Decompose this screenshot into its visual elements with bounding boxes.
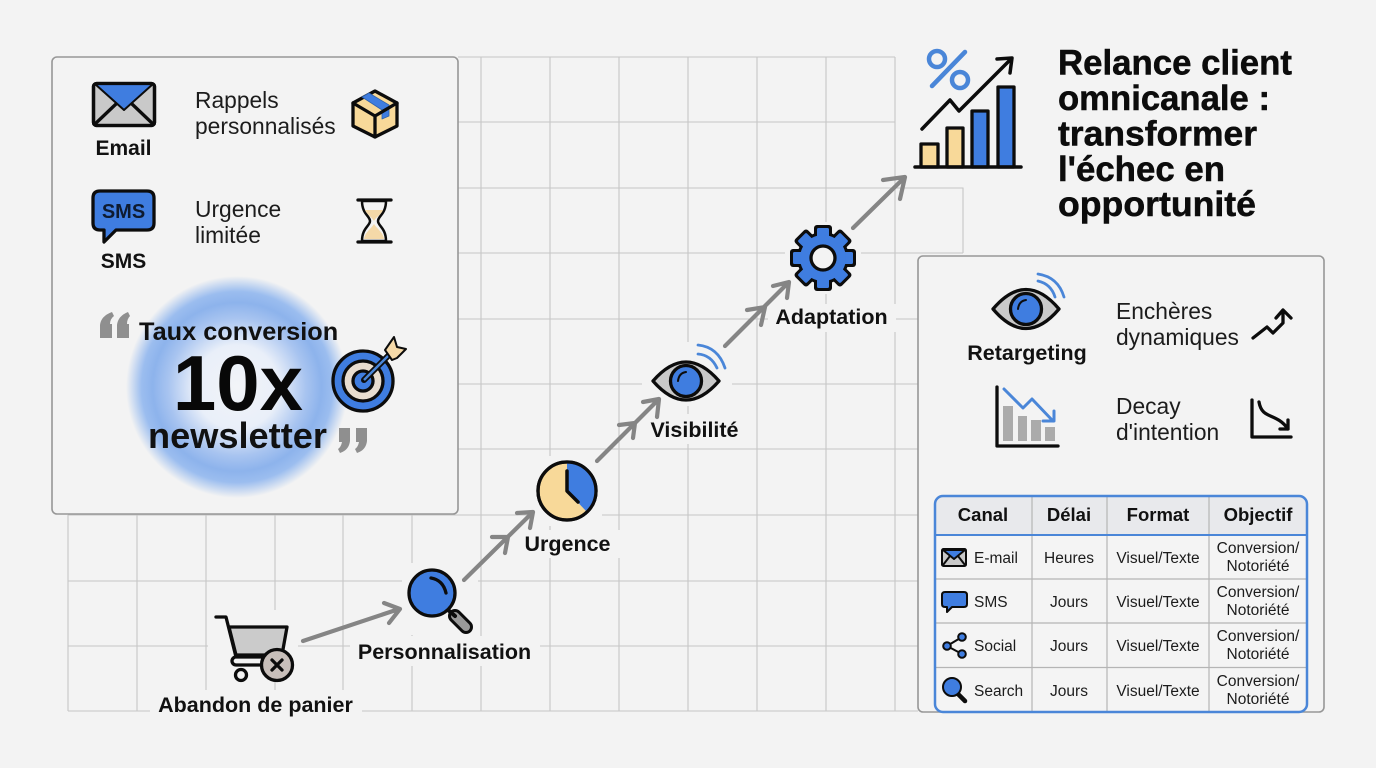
text: limited urgency: Urgence	[195, 196, 281, 222]
row: SMS: Jours	[1050, 594, 1088, 611]
icon: closing quote	[338, 428, 367, 453]
label: Visibilité	[650, 418, 739, 442]
text: dynamic bidding: dynamiques	[1116, 324, 1239, 350]
arrow: visibility to adaptation	[725, 282, 789, 346]
label: Adaptation	[775, 305, 888, 329]
table header: Objectif	[1224, 504, 1293, 525]
row: Search: Notoriété	[1227, 691, 1289, 708]
row: E-mail: E-mail	[974, 550, 1018, 567]
title: omnicanale :	[1058, 79, 1270, 118]
row: Search: Visuel/Texte	[1116, 683, 1200, 700]
table: channels	[935, 496, 1307, 712]
step: Personnalisation	[358, 570, 531, 664]
text: 10x: 10x	[173, 339, 303, 427]
panel: email, SMS and conversion	[52, 57, 458, 514]
callout: conversion rate	[100, 276, 406, 498]
row: E-mail	[942, 540, 1300, 575]
icon: envelope	[94, 84, 154, 126]
icon: decay curve	[1252, 400, 1291, 437]
row: SMS: Notoriété	[1227, 602, 1289, 619]
text: personalised reminders: personnalisés	[195, 113, 336, 139]
title: l'échec en	[1058, 150, 1225, 189]
text: Taux conversion: Taux conversion	[139, 318, 338, 346]
row: SMS: SMS	[974, 594, 1008, 611]
label: Personnalisation	[358, 640, 531, 664]
icon: zigzag up arrow	[1253, 310, 1291, 338]
label: Abandon de panier	[158, 693, 353, 717]
row: Search: Jours	[1050, 683, 1088, 700]
text: intent decay: Decay	[1116, 393, 1181, 419]
icon: growth chart with percent	[915, 51, 1021, 167]
title: opportunité	[1058, 185, 1256, 224]
title: transformer	[1058, 114, 1257, 154]
row: Search: Search	[974, 683, 1023, 700]
arrow: urgency to visibility	[597, 399, 659, 461]
row: E-mail: Heures	[1044, 550, 1094, 567]
text: dynamic bidding: Enchères	[1116, 298, 1212, 324]
row: Social: Visuel/Texte	[1116, 638, 1200, 655]
label: Retargeting: Retargeting	[967, 341, 1087, 365]
icon: hourglass	[358, 200, 391, 242]
background grid	[68, 57, 963, 718]
icon: eye with signal	[993, 274, 1064, 328]
text: limited urgency: limitée	[195, 222, 261, 248]
step: Adaptation	[775, 225, 888, 329]
icon: gear	[790, 225, 856, 291]
arrow: adaptation to growth	[853, 177, 905, 228]
panel: retargeting and channels	[918, 256, 1324, 712]
label: SMS: SMS	[101, 250, 146, 273]
icon: opening quote	[100, 312, 130, 338]
text: personalised reminders	[195, 87, 336, 139]
text: limited urgency	[195, 196, 281, 248]
row: Search: Conversion/	[1217, 673, 1300, 690]
text: newsletter: newsletter	[148, 415, 327, 456]
row: Social	[943, 628, 1300, 663]
title	[1058, 44, 1292, 224]
row: SMS: Conversion/	[1217, 584, 1300, 601]
arrow: personalisation to urgency	[464, 512, 533, 580]
icon: eye	[653, 345, 725, 400]
row: E-mail: Conversion/	[1217, 540, 1300, 557]
label: Urgence	[524, 532, 611, 556]
row: E-mail: Visuel/Texte	[1116, 550, 1200, 567]
row: Social: Notoriété	[1227, 646, 1289, 663]
icon: parcel box	[353, 91, 397, 137]
step: Visibilité	[650, 345, 739, 442]
icon: declining bar chart	[997, 387, 1058, 446]
text: dynamic bidding	[1116, 298, 1239, 350]
icon: clock	[538, 462, 596, 520]
row: SMS	[942, 584, 1300, 619]
step: Abandon de panier	[158, 617, 353, 717]
row: Social: Jours	[1050, 638, 1088, 655]
row: Search	[943, 673, 1300, 708]
row: SMS: Visuel/Texte	[1116, 594, 1200, 611]
icon: cart with cross	[216, 617, 292, 680]
table header	[958, 504, 1293, 525]
table header: Canal	[958, 504, 1008, 525]
step: Urgence	[524, 462, 611, 556]
row: Social: Conversion/	[1217, 628, 1300, 645]
row: E-mail: Notoriété	[1227, 558, 1289, 575]
icon: SMS bubble: SMS	[102, 201, 145, 223]
icon: magnifier	[409, 570, 466, 627]
label: Email: Email	[95, 137, 152, 160]
text: intent decay	[1116, 393, 1219, 445]
table header: Délai	[1047, 504, 1091, 525]
text: personalised reminders: Rappels	[195, 87, 279, 113]
row: Social: Social	[974, 638, 1016, 655]
icon: target	[333, 337, 406, 411]
table header: Format	[1127, 504, 1189, 525]
title: Relance client	[1058, 44, 1292, 82]
text: intent decay: d'intention	[1116, 419, 1219, 445]
blue glow	[126, 276, 348, 498]
icon: SMS bubble	[93, 191, 154, 242]
arrow: cart to personalisation	[303, 603, 400, 641]
